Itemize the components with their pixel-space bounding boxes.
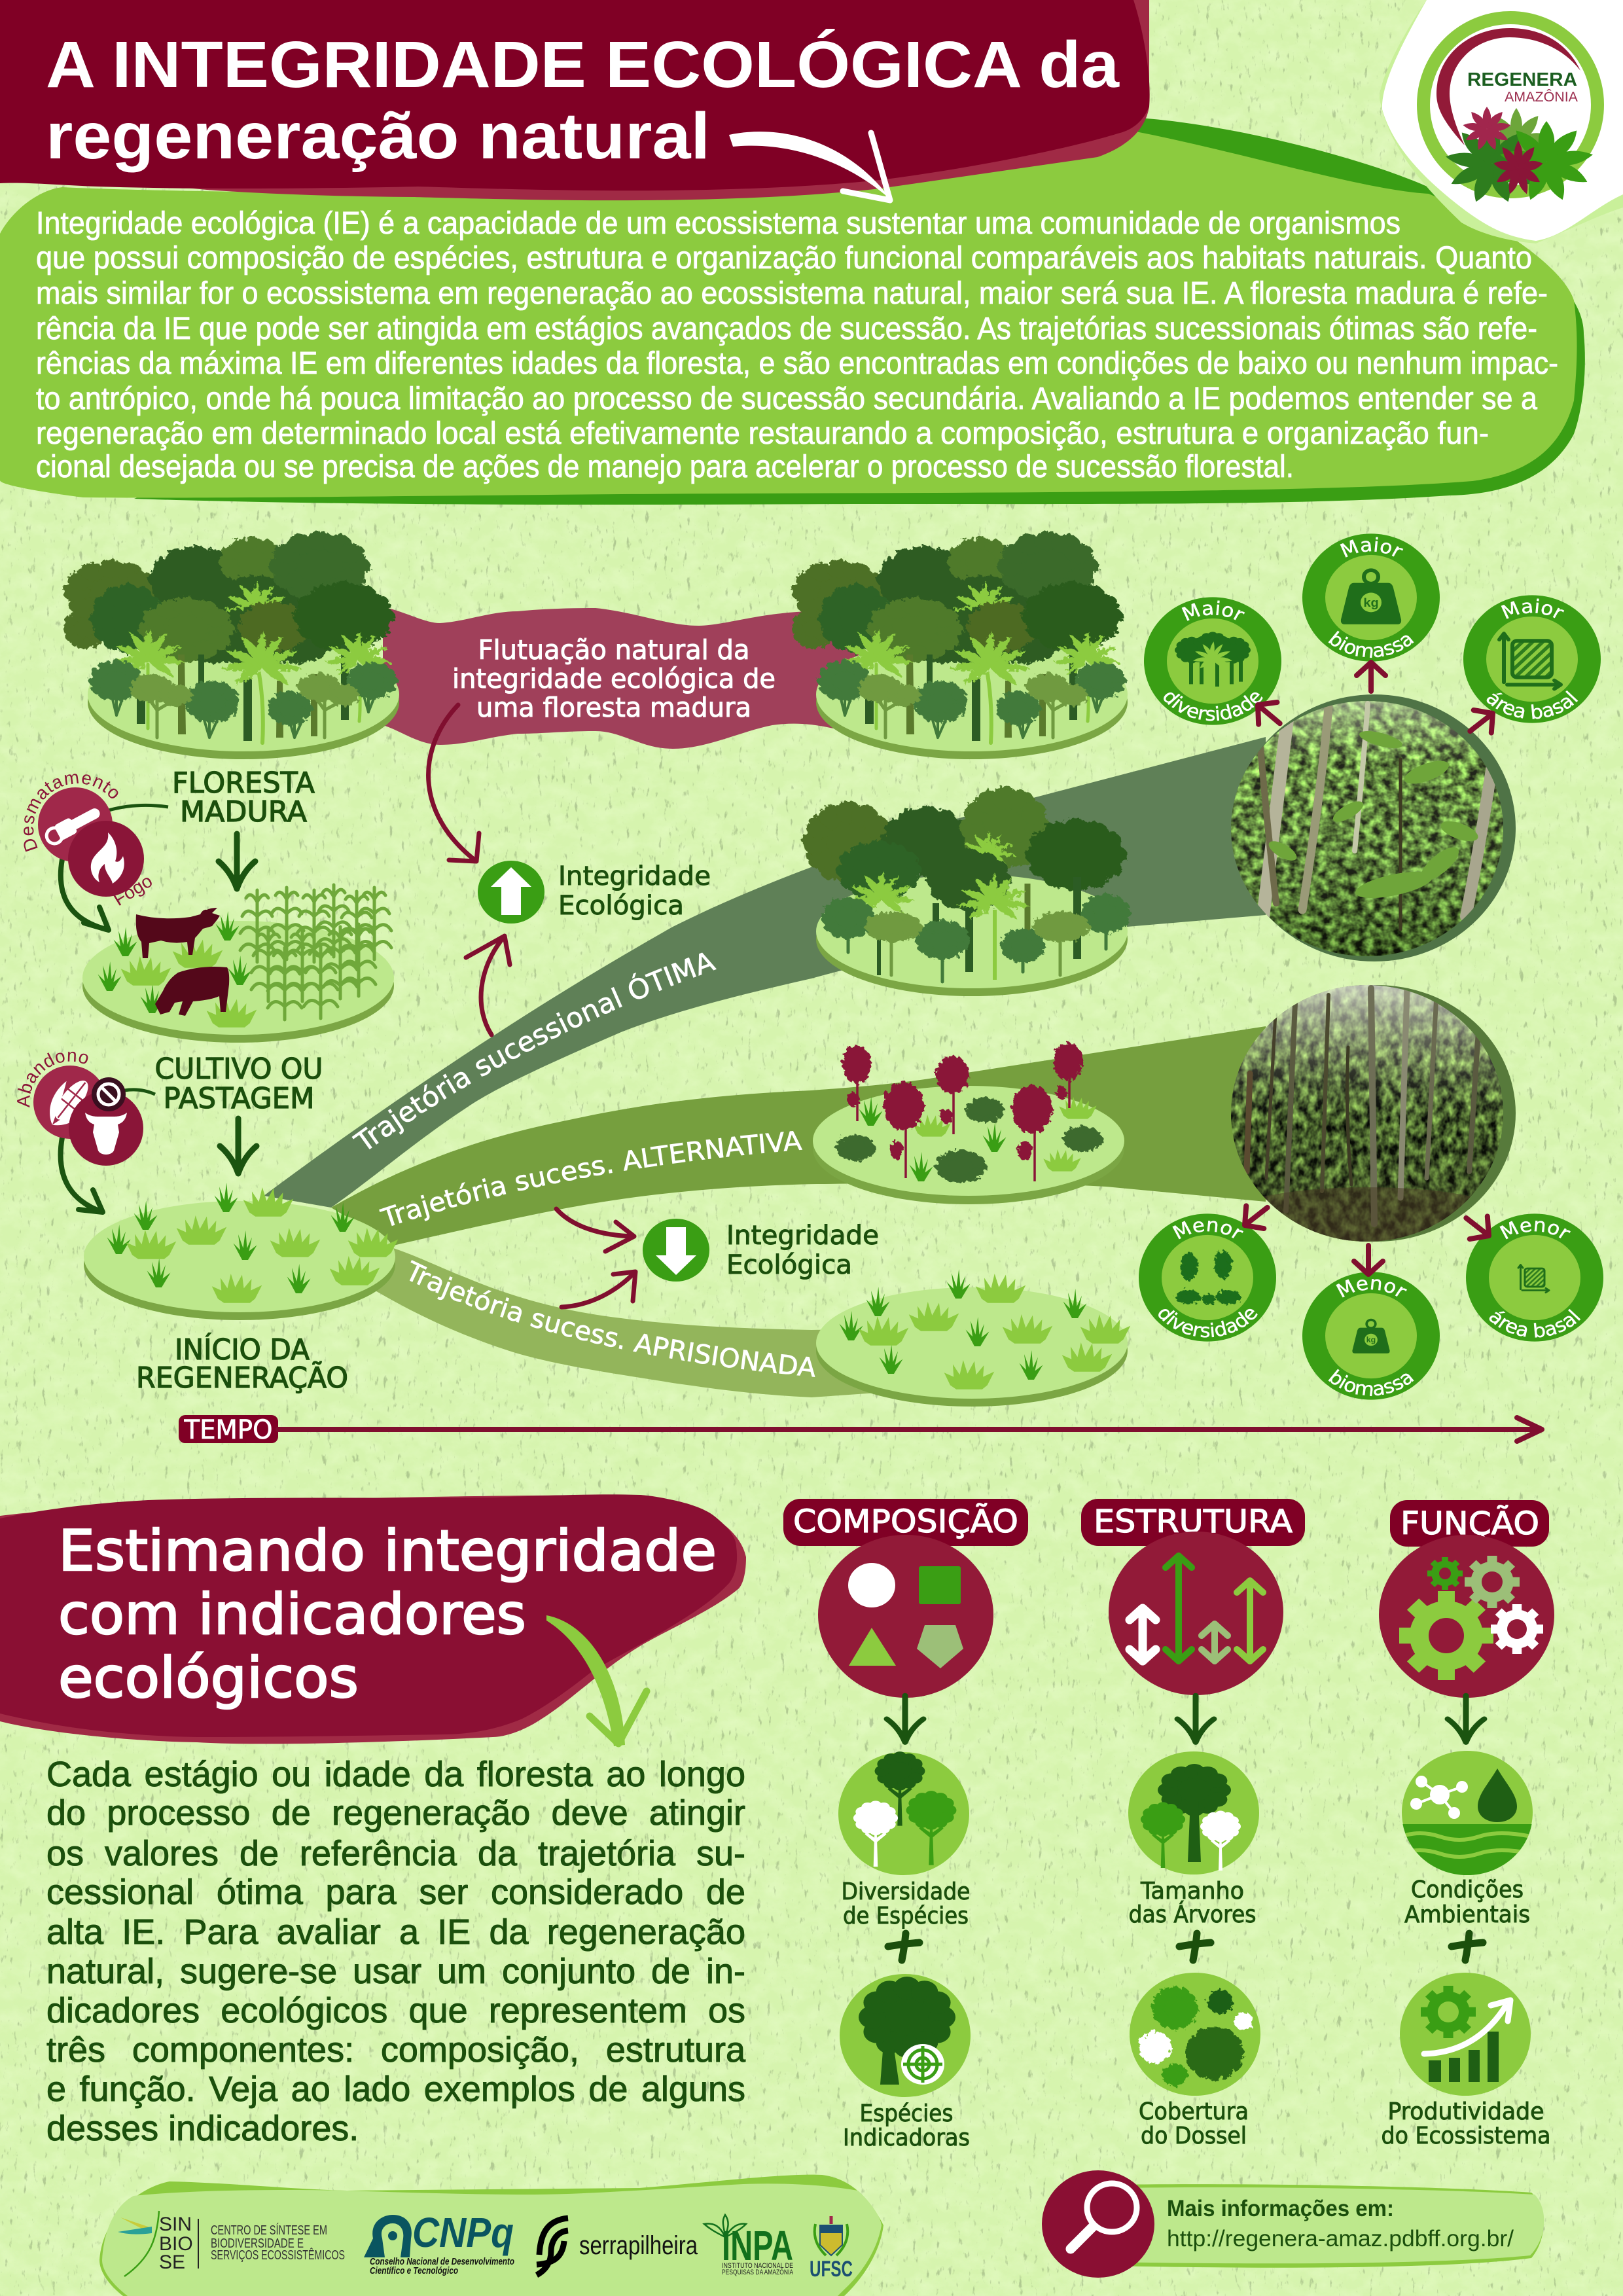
indicator: species diversity: de Espécies [843,1903,969,1929]
paragraph: estimating integrity: desses indicadores. [46,2109,359,2148]
indicator: species diversity [838,1751,970,1929]
SinBiose logo: BIODIVERSIDADE E [211,2236,304,2251]
indicator: higher diversity [1144,597,1281,726]
panel: intro green blob [0,118,1585,505]
arrow: title to intro [729,132,891,200]
indicator: higher basal area: área basal [1481,687,1583,724]
SinBiose logo: SERVIÇOS ECOSSISTÊMICOS [211,2248,345,2263]
section title: com indicadores [58,1582,526,1647]
indicator: canopy cover [1130,1973,1260,2149]
intro paragraph: mais similar for o ecossistema em regeneração ao ecossistema natural, maior será sua IE. A floresta madura é refe- [36,276,1548,311]
arrow: forest to crops [219,834,255,889]
logo maroon crescent [1436,28,1580,145]
indicator: higher biomass: Maior [1340,537,1403,558]
arrow: trapped to integrity down [562,1272,635,1307]
indicator: lower biomass: biomassa [1324,1366,1418,1401]
icon: deforestation and fire [17,767,168,930]
label: crops or pasture: CULTIVO OU [154,1052,323,1086]
more info pill: http://regenera-amaz.pdbff.org.br/ [1167,2226,1514,2251]
arrow: function down [1448,1696,1484,1742]
paragraph: estimating integrity: dicadores ecológicos que representem os [46,1991,745,2030]
pill: composition: COMPOSIÇÃO [793,1503,1018,1540]
INPA logo: INPA [722,2222,793,2269]
INPA logo: PESQUISAS DA AMAZÔNIA [722,2268,794,2276]
paragraph: estimating integrity: natural, sugere-se usar um conjunto de in- [46,1952,745,1991]
Serrapilheira logo [537,2218,698,2275]
indicator: higher biomass [1302,533,1440,663]
section title [58,1518,717,1711]
CNPq logo: CNPq [412,2209,514,2256]
CNPq logo: Conselho Nacional de Desenvolvimento [370,2256,514,2267]
trees icon [1175,632,1251,687]
trajectory: alternative [331,1026,1266,1246]
indicator: environmental conditions: Ambientais [1404,1901,1530,1928]
indicator: environmental conditions [1400,1751,1534,1928]
indicator: canopy cover: Cobertura [1139,2098,1249,2125]
indicator: tree size: das Árvores [1128,1901,1257,1928]
logo badge: AMAZÔNIA [1505,90,1578,105]
trajectory: optimal [264,737,1266,1208]
intro paragraph [36,206,1558,484]
indicator: lower basal area [1466,1213,1603,1342]
label: integrity down: Integridade [726,1221,879,1251]
logo ring [1423,18,1597,192]
title banner [0,0,1150,200]
corn field [240,885,391,1020]
intro paragraph: Integridade ecológica (IE) é a capacidade de um ecossistema sustentar uma comunidade de organismos [36,206,1400,241]
intro paragraph: cional desejada ou se precisa de ações de manejo para acelerar o processo de sucessão florestal. [36,450,1294,484]
icon circle: composition shapes [818,1535,993,1698]
SinBiose logo: SE [159,2251,185,2273]
plus signs [888,1933,1483,1960]
indicator: higher diversity: diversidade [1164,692,1263,721]
label: mature forest: FLORESTA [172,766,315,800]
label: integrity down: Ecológica [726,1250,852,1280]
intro paragraph: rência da IE que pode ser atingida em estágios avançados de sucessão. As trajetórias sucessionais ótimas são refe- [36,312,1537,346]
indicator: indicator species [840,1974,971,2151]
icon: abandonment: Abandono [17,1051,88,1107]
pill: composition [783,1499,1028,1546]
indicator: tree size [1128,1751,1259,1928]
pill: function [1390,1500,1549,1547]
indicator: canopy cover: do Dossel [1141,2123,1247,2149]
pill: structure: ESTRUTURA [1094,1503,1293,1540]
indicator: lower diversity: Menor [1169,1214,1247,1245]
logos panel [99,2175,883,2296]
INPA logo [704,2215,794,2276]
trajectory: trapped [373,1248,877,1397]
indicator: higher biomass: biomassa [1324,628,1418,663]
CNPq logo [364,2209,514,2276]
paragraph: estimating integrity: alta IE. Para avaliar a IE da regeneração [46,1912,745,1952]
indicator: tree size: Tamanho [1140,1878,1244,1905]
paragraph: estimating integrity: e função. Veja ao lado exemplos de alguns [46,2070,745,2109]
mature forest right [791,531,1128,759]
trajectory labels: Trajetória sucessional ÓTIMA [352,953,717,1149]
SinBiose logo [118,2211,345,2276]
intro paragraph: que possui composição de espécies, estrutura e organização funcional comparáveis aos habitats naturais. Quanto [36,241,1532,276]
label: integrity down [726,1221,879,1280]
logo leaves [1444,107,1594,204]
paragraph: estimating integrity: Cada estágio ou idade da floresta ao longo [46,1755,745,1794]
icon circle: function gears [1379,1535,1554,1698]
water drop [1478,1768,1517,1822]
label: crops or pasture [154,1052,323,1115]
indicator: lower basal area: área basal [1484,1306,1586,1342]
indicator: ecosystem productivity: Produtividade [1387,2098,1544,2125]
CNPq logo: Científico e Tecnológico [370,2265,458,2276]
crops and pasture disc [82,885,394,1043]
fluctuation text: integridade ecológica de [452,663,776,694]
icon circle: structure arrows [1109,1532,1283,1695]
UFSC logo: UFSC [810,2257,853,2282]
paragraph: estimating integrity: três componentes: composição, estrutura [46,2030,745,2070]
trajectory labels: Trajetória sucess. ALTERNATIVA [379,1131,802,1227]
mature forest left [63,531,399,759]
arrow: alternative to integrity down [556,1209,634,1251]
trajectory labels: Trajetória sucess. APRISIONADA [410,1260,815,1377]
label: start of regeneration: REGENERAÇÃO [136,1361,348,1395]
logo wordmark: REGENERA [1467,69,1577,90]
label: crops or pasture: PASTAGEM [164,1082,314,1115]
arrows: photo to indicators [1236,662,1502,1274]
time axis [179,1415,1542,1445]
icon: magnifier [1042,2170,1154,2278]
indicator: higher basal area [1463,595,1601,724]
section banner [0,1494,746,1744]
logo badge [1380,0,1623,243]
indicator: indicator species: Espécies [860,2100,953,2127]
pill: structure [1081,1499,1305,1546]
cow grazing [155,967,229,1016]
section title: ecológicos [58,1645,359,1711]
fluctuation text [452,634,776,723]
indicator: ecosystem productivity [1381,1973,1551,2149]
UFSC logo [810,2216,853,2282]
section title: Estimando integridade [58,1518,717,1584]
label: mature forest [172,766,315,829]
indicator: ecosystem productivity: do Ecossistema [1381,2123,1551,2149]
photo: alternative regrowth [1224,985,1516,1247]
indicator: lower basal area: Menor [1497,1214,1575,1245]
paragraph: estimating integrity: os valores de referência da trajetória su- [46,1834,745,1873]
cow standing [136,908,220,958]
INPA logo: INSTITUTO NACIONAL DE [722,2262,793,2270]
pill: function: FUNÇÃO [1400,1505,1539,1542]
trajectory labels [348,945,817,1384]
indicator: higher diversity: Maior [1182,601,1245,621]
arrow: fluctuation to integrity [429,705,479,861]
intro paragraph: to antrópico, onde há pouca limitação ao processo de sucessão secundária. Avaliando a IE podemos entender se a [36,382,1537,416]
start of regeneration disc [84,1183,398,1320]
optimal trajectory forest [802,786,1132,996]
icon: deforestation and fire: Desmatamento [24,774,118,852]
SinBiose logo: BIO [159,2233,193,2255]
label: mature forest: MADURA [180,795,307,829]
Serrapilheira logo: serrapilheira [579,2231,698,2260]
indicator: species diversity: Diversidade [842,1878,970,1905]
intro paragraph: regeneração em determinado local está efetivamente restaurando a composição, estrutura e organização fun- [36,416,1489,451]
label: start of regeneration [136,1332,348,1395]
label: integrity up: Ecológica [558,891,684,921]
indicator: indicator species: Indicadoras [843,2125,970,2151]
icon: abandonment [13,1045,155,1212]
title [46,28,1120,173]
maroon fluctuation band [383,607,864,749]
paragraph: estimating integrity: do processo de regeneração deve atingir [46,1793,745,1833]
arrow: structure down [1177,1696,1214,1742]
more info pill: Mais informações em: [1167,2196,1394,2221]
indicator: lower biomass [1302,1272,1440,1401]
time axis: TEMPO [184,1415,272,1445]
arrow: green section arrow [546,1615,647,1746]
arrow: crops to regeneration [220,1119,257,1174]
title: A INTEGRIDADE ECOLÓGICA da [46,28,1120,101]
title: regeneração natural [46,99,710,173]
alternative trajectory disc with pioneers [813,1042,1124,1204]
indicator: environmental conditions: Condições [1411,1876,1524,1903]
label: integrity up: Integridade [558,861,711,891]
paragraph: estimating integrity: cessional ótima para ser considerado de [46,1873,745,1912]
icon: ecological integrity down [643,1219,709,1282]
label: integrity up [558,861,711,921]
arrow: optimal to integrity [466,936,510,1035]
arrow: composition down [887,1696,923,1742]
SinBiose logo: SIN [159,2214,192,2235]
indicator: lower diversity: diversidade [1152,1302,1263,1342]
indicator: lower biomass: Menor [1333,1272,1411,1303]
molecule [1412,1777,1467,1818]
more info pill [1113,2184,1544,2268]
label: start of regeneration: INÍCIO DA [175,1332,310,1367]
indicator: higher basal area: Maior [1498,596,1568,624]
intro paragraph: rências da máxima IE em diferentes idades da floresta, e são encontradas em condições de baixo ou nenhum impac- [36,346,1558,381]
photo: mature regrowth [1231,694,1516,961]
SinBiose logo: CENTRO DE SÍNTESE EM [211,2223,327,2238]
icon: ecological integrity up [478,861,544,924]
indicator: lower diversity [1139,1213,1276,1342]
fluctuation text: uma floresta madura [476,692,751,723]
fluctuation text: Flutuação natural da [478,634,750,666]
icon: deforestation and fire: Fogo [110,870,156,910]
trapped trajectory disc [816,1269,1130,1407]
paragraph: estimating integrity [46,0,745,2296]
